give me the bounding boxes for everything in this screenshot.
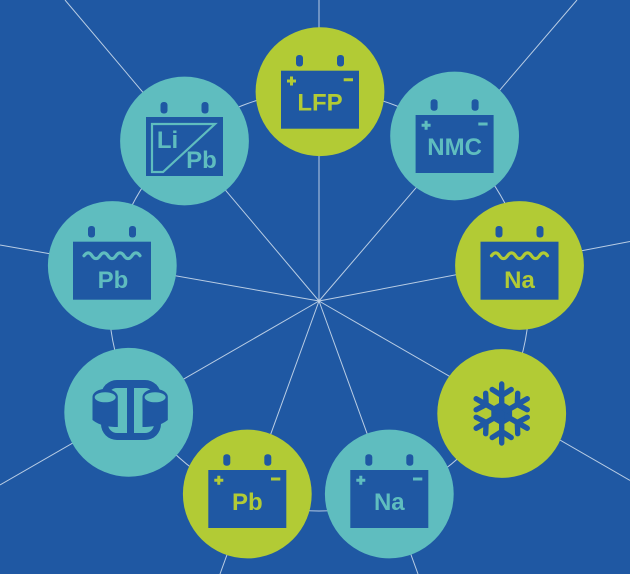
node: LFP battery: LFP [297, 90, 343, 117]
node: Na water battery [455, 201, 584, 330]
node: Na battery: Na [374, 489, 405, 516]
node: Pb battery [183, 430, 312, 558]
node: NMC battery: NMC [427, 134, 482, 161]
node: Pb battery: Pb [232, 489, 263, 516]
node: Li / Pb hybrid battery: Li [157, 127, 178, 154]
node: cold climate snowflake [437, 349, 566, 478]
node: NMC battery [390, 72, 519, 200]
node: Pb water battery [48, 201, 177, 330]
node: Na water battery: Na [504, 267, 535, 294]
node: Li / Pb hybrid battery [120, 77, 249, 205]
node: LFP battery [256, 27, 384, 156]
node: Pb water battery: Pb [98, 267, 128, 294]
node: Li / Pb hybrid battery: Pb [186, 147, 217, 174]
node: Na battery [325, 430, 454, 558]
node: supercapacitor cells [64, 348, 193, 477]
